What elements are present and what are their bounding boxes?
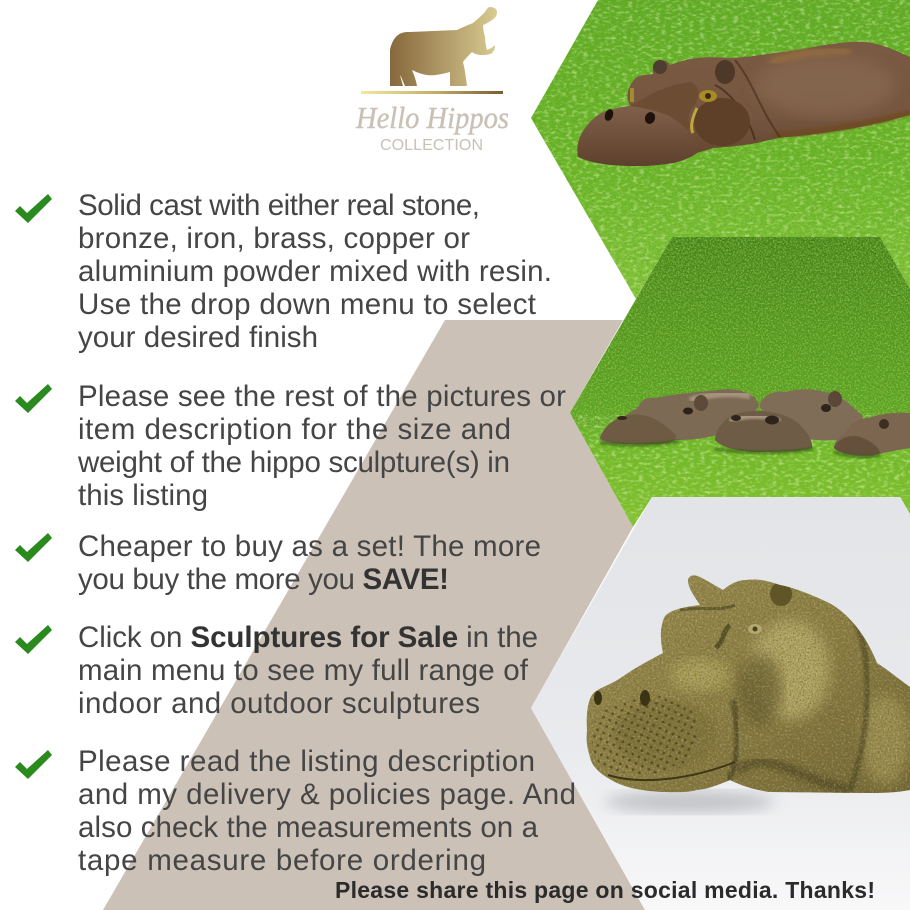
hippo eye xyxy=(699,90,717,102)
hippo left xyxy=(600,389,759,444)
hippo ear xyxy=(715,60,735,84)
body shading xyxy=(760,59,890,114)
icon: check mark xyxy=(15,384,52,413)
text block: Click on Sculptures for Sale in the xyxy=(78,621,538,654)
icon: check mark xyxy=(15,625,52,654)
eye xyxy=(748,624,762,634)
hippo small, right xyxy=(834,413,910,456)
bullet 1 xyxy=(15,189,552,354)
text block: Use the drop down menu to select xyxy=(78,288,536,321)
text block: bronze, iron, brass, copper or xyxy=(78,222,470,255)
bullet 4 xyxy=(15,621,538,720)
hippo neck and cheek xyxy=(694,98,750,146)
text block xyxy=(78,621,538,720)
text block xyxy=(78,189,552,354)
text block: your desired finish xyxy=(78,321,318,354)
hippo centre, front xyxy=(715,411,812,452)
footer note: Please share this page on social media. Thanks! xyxy=(335,877,875,903)
text block: item description for the size and xyxy=(78,413,511,446)
text block xyxy=(77,380,566,512)
bullet 2 xyxy=(15,380,566,512)
text block: main menu to see my full range of xyxy=(78,654,529,687)
logo script name: Hello Hippos xyxy=(355,100,509,135)
hippo right, back xyxy=(760,389,863,440)
photo panel: bronze hippo head xyxy=(530,497,910,910)
text block: Solid cast with either real stone, xyxy=(78,189,480,222)
text block: also check the measurements on a xyxy=(78,811,539,844)
text block: tape measure before ordering xyxy=(78,844,486,877)
text block: you buy the more you SAVE! xyxy=(78,563,449,596)
logo: Hello Hippos Collection xyxy=(355,7,509,154)
ear xyxy=(770,582,792,606)
text block: this listing xyxy=(78,479,208,512)
photo panel: hippo resting on grass xyxy=(530,0,910,300)
logo hippo silhouette xyxy=(390,7,497,86)
panel: beige background shape xyxy=(103,320,645,910)
bullet 5 xyxy=(15,745,576,877)
bronze head xyxy=(585,570,910,795)
logo bar xyxy=(361,91,503,94)
photo panel: group of hippos on grass xyxy=(570,237,910,530)
text block xyxy=(78,530,541,596)
text block: weight of the hippo sculpture(s) in xyxy=(77,446,510,479)
hippo nostrils xyxy=(604,109,614,121)
contact shadows xyxy=(600,441,880,457)
text block: and my delivery & policies page. And xyxy=(78,778,576,811)
text block: Cheaper to buy as a set! The more xyxy=(78,530,541,563)
text block xyxy=(78,745,576,877)
text block: indoor and outdoor sculptures xyxy=(78,687,480,720)
hippo body xyxy=(577,42,910,166)
icon: check mark xyxy=(15,533,52,562)
bullet 3 xyxy=(15,530,541,596)
snout pores xyxy=(592,696,697,774)
text block: Please read the listing description xyxy=(78,745,535,778)
text block: Please see the rest of the pictures or xyxy=(78,380,566,413)
icon: check mark xyxy=(15,194,52,223)
hippo snout xyxy=(577,106,697,166)
shadow under sculpture xyxy=(605,791,775,813)
icon: check mark xyxy=(15,750,52,779)
hippo far ear xyxy=(653,60,667,74)
text block: aluminium powder mixed with resin. xyxy=(78,255,552,288)
nostrils xyxy=(640,690,650,706)
logo subtitle: COLLECTION xyxy=(380,137,483,154)
